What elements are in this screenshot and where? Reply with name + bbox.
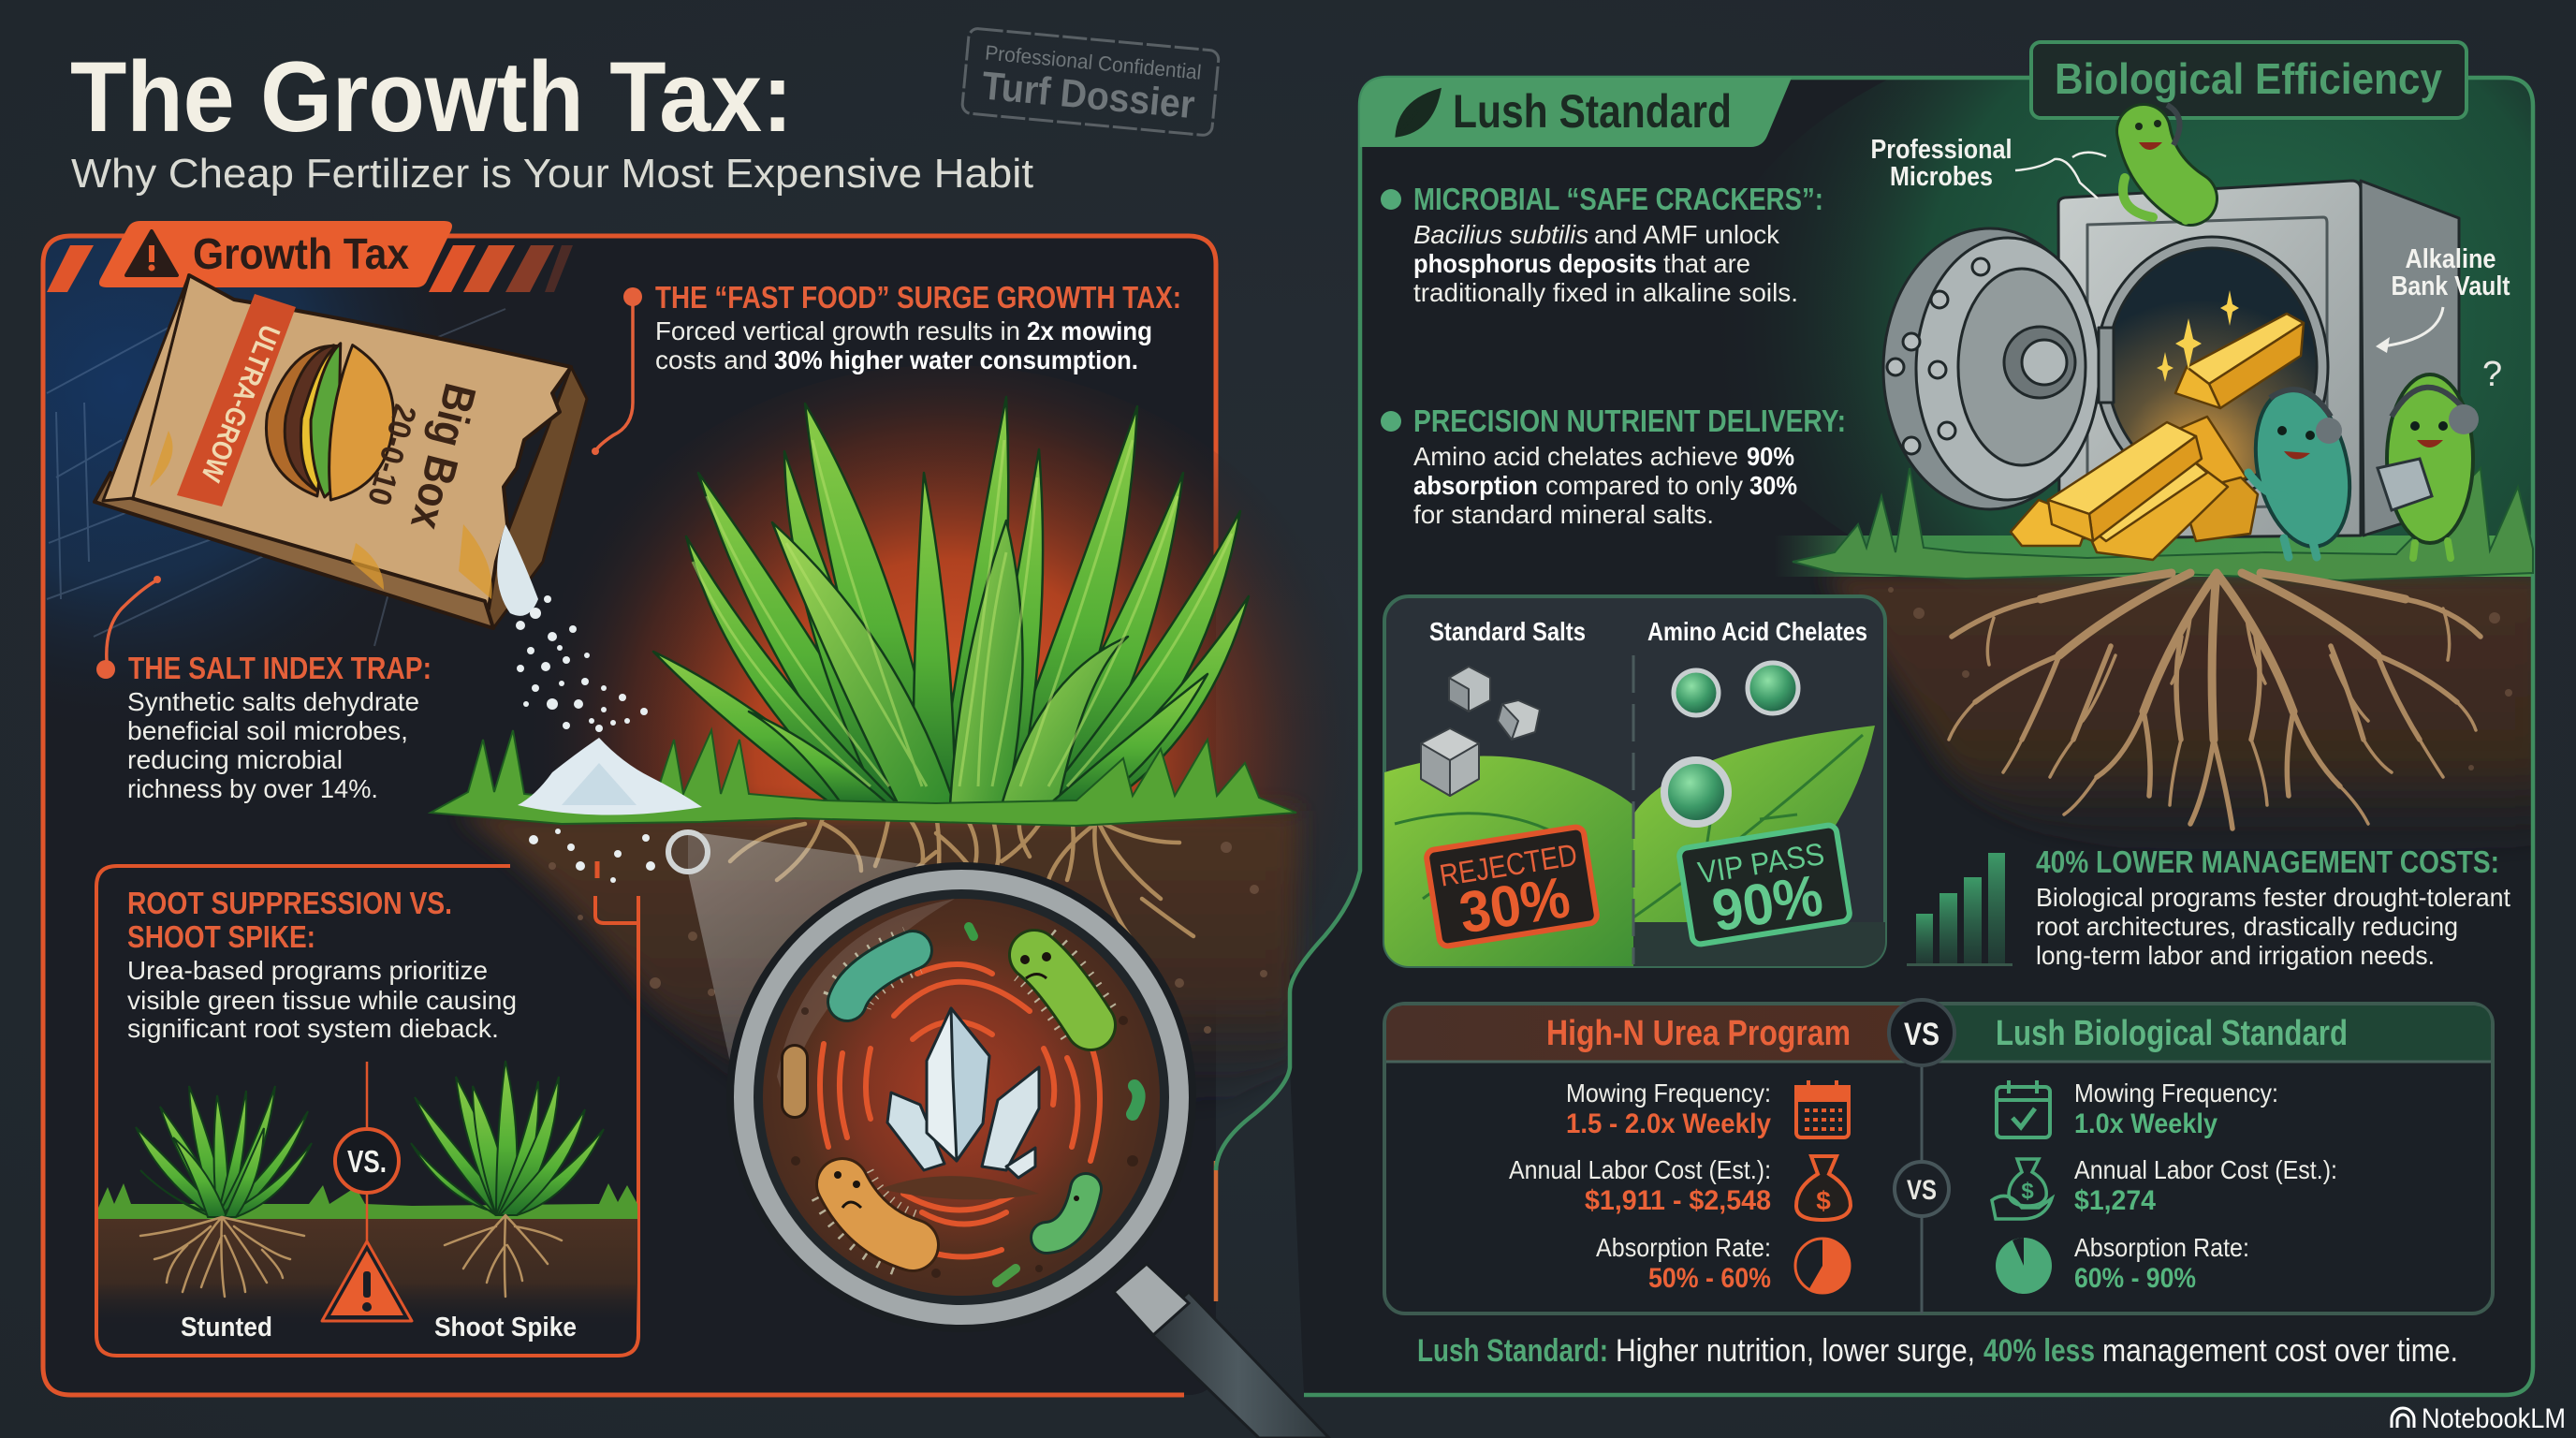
- right column stats: $1,274: [2074, 1185, 2156, 1216]
- callout: salt index trap: reducing microbial: [127, 745, 343, 774]
- body text: Urea-based programs prioritize: [127, 956, 488, 985]
- summary line: Lush Standard:: [1417, 1333, 1608, 1369]
- text block: safe crackers: Bacilius subtilis: [1413, 220, 1588, 249]
- callout: salt index trap: richness by over 14%.: [127, 774, 378, 803]
- heading box: biological efficiency: Biological Efficiency: [2055, 54, 2442, 103]
- summary line: 40% less: [1983, 1333, 2095, 1369]
- icon: orange calendar: [1796, 1080, 1849, 1137]
- microbe: top: [2123, 105, 2190, 220]
- text block: lower management costs: root architectures, drastically reducing: [2036, 912, 2458, 941]
- left column stats: Mowing Frequency:: [1566, 1078, 1771, 1108]
- panel: growth tax: [43, 221, 1367, 1395]
- summary line: Higher nutrition, lower surge,: [1616, 1333, 1975, 1369]
- icon: green calendar: [1997, 1080, 2050, 1137]
- stamp: turf dossier: Professional Confidential: [984, 41, 1203, 84]
- crystals: [887, 1008, 1039, 1178]
- table header right: [1922, 1005, 2491, 1062]
- text block: safe crackers: that are: [1663, 249, 1750, 278]
- text block: precision delivery: 90%: [1747, 442, 1794, 471]
- right column stats: Annual Labor Cost (Est.):: [2074, 1155, 2337, 1184]
- sparkles: [2157, 290, 2239, 382]
- lens soil: [763, 899, 1160, 1296]
- callout: salt index trap: [96, 576, 432, 803]
- text block: safe crackers: MICROBIAL “SAFE CRACKERS”:: [1413, 182, 1823, 216]
- microbe: green with clipboard: [2378, 355, 2502, 558]
- text block: safe crackers: and AMF unlock: [1594, 220, 1780, 249]
- text block: safe crackers: traditionally fixed in alkaline soils.: [1413, 278, 1798, 307]
- vault opening: [2096, 237, 2328, 497]
- vault front: [2058, 181, 2361, 538]
- panel outline: [43, 236, 1216, 1395]
- soil and roots: [459, 810, 1296, 1114]
- panel outline: [1216, 78, 2533, 1395]
- label: alkaline bank vault: Alkaline: [2406, 244, 2496, 274]
- microbe: teal: [2242, 381, 2364, 557]
- text block: safe crackers: [1381, 182, 1823, 307]
- panel: lush standard: [1216, 0, 2576, 1395]
- rejected stamp: REJECTED: [1437, 837, 1579, 893]
- comparison table: Lush Biological Standard: [1996, 1014, 2348, 1053]
- soil specks: [791, 1007, 1138, 1278]
- bag stripe: [177, 294, 296, 506]
- big roots: [1949, 573, 2481, 829]
- icon: orange pie: [1795, 1238, 1851, 1294]
- question mark: ?: [2482, 355, 2502, 394]
- soil strip: [98, 1183, 637, 1328]
- bar chart icon: [1907, 853, 2012, 966]
- right column stats: Mowing Frequency:: [2074, 1078, 2278, 1108]
- ring: [726, 862, 1196, 1332]
- label: professional microbes: [1870, 135, 2106, 198]
- left column stats: $1,911 - $2,548: [1585, 1185, 1771, 1216]
- icon: green hand with money: [1992, 1159, 2052, 1219]
- midrib highlights: [693, 440, 1232, 786]
- vault side: [2361, 181, 2459, 536]
- bag body: [131, 275, 571, 609]
- panel: root suppression: visible green tissue while causing: [127, 986, 517, 1015]
- text block: precision delivery: [1381, 404, 1846, 529]
- chelate spheres: [1664, 663, 1798, 824]
- icon: orange money bag: $: [1816, 1186, 1831, 1215]
- vip pass stamp: [1678, 824, 1852, 948]
- title: The Growth Tax:: [70, 40, 793, 153]
- tab: lush standard: [1360, 78, 1792, 147]
- label: professional microbes: Professional: [1870, 135, 2012, 165]
- panel: standard salts vs amino acid chelates: [1384, 596, 1886, 969]
- icon: magnifier with cone: [668, 831, 1329, 1438]
- left column stats: 50% - 60%: [1648, 1263, 1771, 1294]
- label: alkaline bank vault: Bank Vault: [2391, 271, 2510, 301]
- vs divider: [335, 1062, 399, 1245]
- text block: lower management costs: Biological programs fester drought-tolerant: [2036, 883, 2510, 912]
- bacteria: [795, 927, 1139, 1283]
- salt pile: [518, 738, 702, 815]
- text block: lower management costs: 40% LOWER MANAGEMENT COSTS:: [2036, 844, 2499, 879]
- small lens: [668, 832, 708, 872]
- rejected stamp: 30%: [1456, 865, 1574, 946]
- handle: [1147, 1292, 1329, 1438]
- text block: precision delivery: Amino acid chelates achieve: [1413, 442, 1738, 471]
- label: alkaline bank vault: [2376, 244, 2510, 353]
- tag: growth tax: [99, 221, 452, 287]
- callout: fast food surge: [592, 280, 1181, 455]
- panel: root suppression: Shoot Spike: [434, 1313, 577, 1343]
- vs badge top: VS: [1904, 1017, 1939, 1052]
- comparison table: High-N Urea Program: [1546, 1014, 1851, 1053]
- warning triangle: [322, 1241, 412, 1321]
- text block: lower management costs: [2036, 844, 2510, 970]
- text block: precision delivery: 30%: [1749, 471, 1797, 500]
- vip pass stamp: 90%: [1708, 863, 1827, 945]
- icon: main grass plant: [653, 397, 1249, 805]
- icon: fertilizer bag: ULTRA-GROW: [195, 320, 285, 486]
- title block: [70, 40, 1033, 197]
- rejected stamp: [1426, 826, 1599, 950]
- panel: standard salts vs amino acid chelates: Amino Acid Chelates: [1647, 617, 1867, 646]
- column headings: Standard Salts: [1429, 617, 1586, 646]
- falling salt stream: [497, 524, 677, 883]
- vip pass stamp: VIP PASS: [1695, 836, 1826, 890]
- grass blades back: [805, 404, 945, 805]
- soil right: [1827, 577, 2531, 807]
- soil specks right: [1888, 587, 2512, 770]
- stamp: turf dossier: [961, 28, 1220, 136]
- callout: fast food surge: Forced vertical growth results in: [655, 316, 1020, 345]
- left column stats: [1509, 1078, 1771, 1294]
- panel: root suppression: [96, 861, 640, 1356]
- red glow: [524, 365, 1367, 1114]
- comparison table: [1384, 1000, 2493, 1313]
- panel: root suppression: SHOOT SPIKE:: [127, 919, 315, 954]
- callout: fast food surge: THE “FAST FOOD” SURGE GROWTH TAX:: [655, 280, 1181, 315]
- heading: ROOT SUPPRESSION VS.: [127, 886, 452, 920]
- icon: green pie: [1996, 1238, 2052, 1294]
- left column stats: Annual Labor Cost (Est.):: [1509, 1155, 1771, 1184]
- tag: growth tax: Growth Tax: [193, 229, 409, 278]
- vs badge middle: VS: [1907, 1175, 1937, 1206]
- summary line: management cost over time.: [2102, 1333, 2458, 1369]
- leaf left: [1384, 756, 1633, 966]
- text block: lower management costs: long-term labor and irrigation needs.: [2036, 941, 2435, 970]
- text block: precision delivery: compared to only: [1545, 471, 1743, 500]
- bag back flap: [482, 367, 587, 628]
- text block: precision delivery: absorption: [1413, 471, 1538, 500]
- icon: green hand with money: $: [2021, 1179, 2034, 1204]
- right column stats: Absorption Rate:: [2074, 1233, 2249, 1262]
- hazard stripes: [47, 245, 573, 292]
- view cone: [688, 831, 936, 1105]
- vs badge top: [1889, 1000, 1954, 1065]
- bag labels: Big Box: [401, 378, 485, 535]
- callout: salt index trap: beneficial soil microbes,: [127, 716, 408, 745]
- illustration: gold bars: [2011, 314, 2304, 560]
- table header left: [1386, 1005, 1922, 1062]
- right column stats: 60% - 90%: [2074, 1263, 2196, 1294]
- left column stats: 1.5 - 2.0x Weekly: [1566, 1108, 1771, 1139]
- red shock rings: [820, 964, 1100, 1256]
- bag bottom fold: [95, 473, 493, 628]
- small roots: [140, 1215, 562, 1297]
- label: professional microbes: Microbes: [1890, 162, 1993, 192]
- illustration: vault: [1883, 181, 2459, 538]
- callout: fast food surge: costs and: [655, 345, 768, 374]
- callout: salt index trap: Synthetic salts dehydrate: [127, 687, 419, 716]
- burger: [256, 334, 403, 507]
- icon: fertilizer bag: 20-0-10: [360, 401, 423, 509]
- callout: fast food surge: 2x mowing: [1027, 316, 1152, 345]
- icon: orange money bag: [1796, 1156, 1851, 1220]
- heading box: biological efficiency: [2031, 42, 2466, 118]
- labels: Stunted: [181, 1313, 272, 1343]
- text block: safe crackers: phosphorus deposits: [1413, 249, 1657, 278]
- left plant: [136, 1086, 312, 1217]
- callout: salt index trap: THE SALT INDEX TRAP:: [128, 651, 432, 685]
- summary line: [1417, 1333, 2458, 1369]
- salt cubes: [1421, 667, 1540, 796]
- vault door: [1883, 228, 2097, 509]
- grass strip: [431, 730, 1296, 826]
- right column stats: 1.0x Weekly: [2074, 1108, 2217, 1139]
- text block: precision delivery: for standard mineral salts.: [1413, 500, 1714, 529]
- illustration: grass right: [1793, 468, 2533, 580]
- subtitle: Why Cheap Fertilizer is Your Most Expensive Habit: [71, 151, 1033, 197]
- stamp: turf dossier: Turf Dossier: [980, 63, 1196, 126]
- panel: root suppression: significant root system dieback.: [127, 1014, 499, 1043]
- leaf right: [1633, 726, 1875, 925]
- callout: fast food surge: 30% higher water consumption.: [774, 345, 1138, 374]
- left column stats: Absorption Rate:: [1596, 1233, 1771, 1262]
- vs badge middle: [1895, 1162, 1949, 1216]
- icon: fertilizer bag: [95, 275, 587, 628]
- right plant: [411, 1061, 604, 1215]
- bacteria cilia: [842, 950, 1090, 1245]
- bracket: [595, 896, 640, 923]
- text block: precision delivery: PRECISION NUTRIENT DELIVERY:: [1413, 404, 1846, 438]
- vs divider: VS.: [347, 1144, 387, 1179]
- tab: lush standard: Lush Standard: [1453, 85, 1732, 138]
- right column stats: [2074, 1078, 2337, 1294]
